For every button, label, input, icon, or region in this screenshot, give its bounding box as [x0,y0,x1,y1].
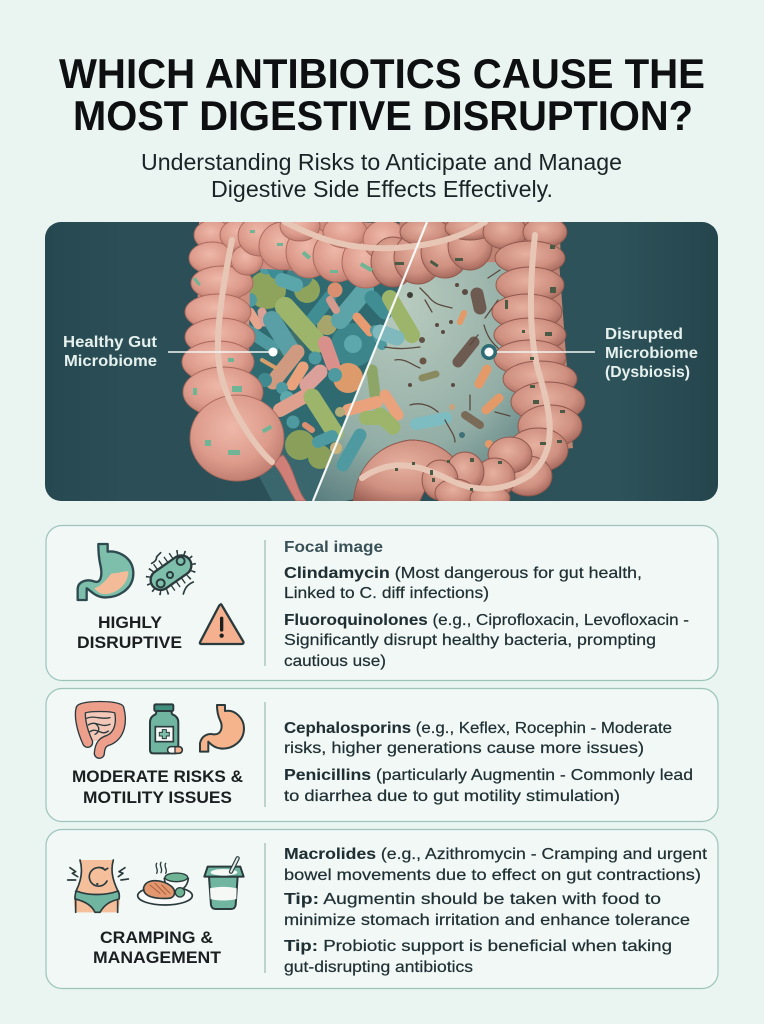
subtitle [141,149,622,202]
title [59,50,705,139]
subtitle: Digestive Side Effects Effectively. [211,176,553,202]
text block: highly disruptive drugs: Clindamycin (Most dangerous for gut health, [284,565,642,582]
text block: highly disruptive drugs: Focal image [284,539,383,556]
heading: highly disruptive: DISRUPTIVE [77,633,182,652]
text block: moderate risk drugs [284,720,693,805]
healthy colon segments [182,211,407,501]
subtitle: Understanding Risks to Anticipate and Manage [141,149,622,175]
colon longitudinal bands [218,222,550,489]
pointer: healthy [168,348,278,356]
text block: moderate risk drugs: Cephalosporins (e.g., Keflex, Rocephin - Moderate [284,720,672,737]
text block: macrolides and tips: Tip: Augmentin should be taken with food to [284,891,661,908]
label: healthy gut microbiome [64,336,157,366]
panel: cramping and management [46,830,718,988]
label: disrupted microbiome: Disrupted [605,326,683,343]
label: healthy gut microbiome: Microbiome [64,353,157,370]
icon: stomach orange [200,705,244,752]
icon: medicine bottle [150,704,182,753]
label: disrupted microbiome: (Dysbiosis) [605,364,690,381]
disrupted microbiome debris [380,270,510,448]
disrupted colon flecks [395,245,565,491]
text block: macrolides and tips [284,846,708,976]
pointer: disrupted [481,344,595,360]
label: healthy gut microbiome: Healthy Gut [63,334,158,351]
panel: highly disruptive [46,526,718,680]
title: MOST DIGESTIVE DISRUPTION? [73,92,693,139]
panel: moderate risks [46,688,718,822]
heading: moderate risks [72,767,243,807]
diagonal divider [313,222,427,501]
dysbiosis interior backdrop [314,262,520,501]
panel: gut microbiome illustration [45,211,718,510]
text block: macrolides and tips: bowel movements due to effect on gut contractions) [284,867,701,884]
text block: highly disruptive drugs [284,539,689,670]
icon: warning triangle [200,604,243,644]
icon: bacterium [145,549,197,596]
heading: moderate risks: MODERATE RISKS & [72,767,243,786]
icon: cramping abdomen [68,860,128,912]
text block: moderate risk drugs: risks, higher generations cause more issues) [284,740,644,757]
heading: cramping and management [93,928,222,967]
heading: cramping and management: MANAGEMENT [93,948,222,967]
text block: highly disruptive drugs: cautious use) [284,653,386,670]
text block: moderate risk drugs: Penicillins (particularly Augmentin - Commonly lead [284,767,693,784]
colon surface flecks [193,230,373,455]
disrupted colon segments [353,215,585,510]
icon: plate of food [138,862,192,905]
heading: moderate risks: MOTILITY ISSUES [83,788,232,807]
text block: highly disruptive drugs: Fluoroquinolones (e.g., Ciprofloxacin, Levofloxacin - [284,612,689,629]
title: WHICH ANTIBIOTICS CAUSE THE [59,50,705,97]
label: disrupted microbiome [605,326,698,381]
text block: highly disruptive drugs: Significantly disrupt healthy bacteria, prompting [284,632,656,649]
text block: highly disruptive drugs: Linked to C. diff infections) [284,585,489,602]
text block: macrolides and tips: gut-disrupting antibiotics [284,959,473,976]
icon: intestines [79,705,121,753]
heading: cramping and management: CRAMPING & [100,928,213,947]
heading: highly disruptive [77,613,182,652]
healthy interior backdrop [249,286,400,501]
text block: macrolides and tips: minimize stomach irritation and enhance tolerance [284,912,690,929]
healthy bacteria cluster [243,260,385,469]
label: disrupted microbiome: Microbiome [605,345,698,362]
icon: stomach [78,544,133,600]
text block: macrolides and tips: Macrolides (e.g., Azithromycin - Cramping and urgent [284,846,708,863]
text block: moderate risk drugs: to diarrhea due to gut motility stimulation) [284,788,620,805]
text block: macrolides and tips: Tip: Probiotic support is beneficial when taking [284,938,672,955]
icon: yogurt cup [204,858,244,909]
heading: highly disruptive: HIGHLY [98,613,163,632]
